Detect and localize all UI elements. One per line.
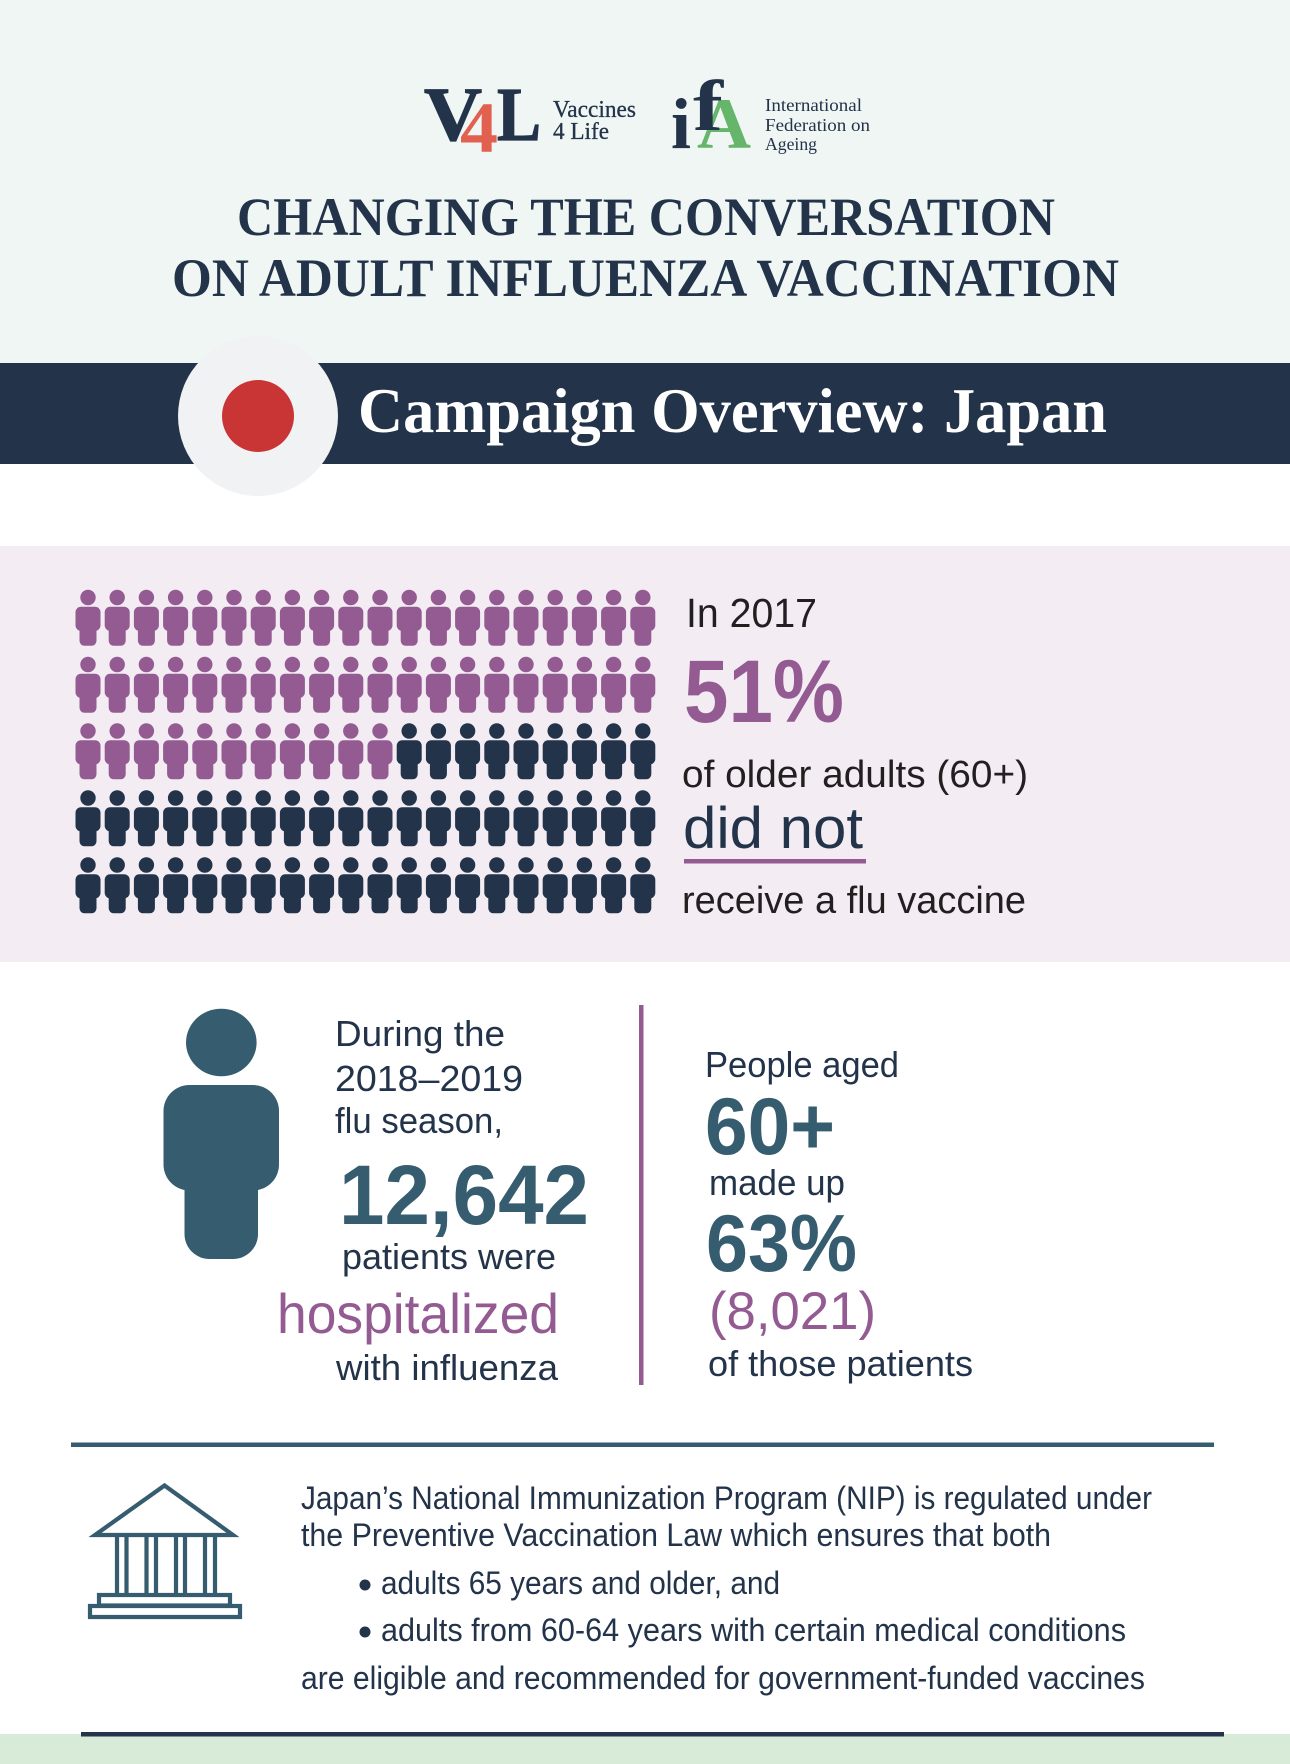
text block: 51% statistic: receive a flu vaccine	[682, 880, 1026, 922]
text block: people aged 60+: of those patients	[708, 1343, 973, 1384]
text block: people aged 60+	[705, 1044, 973, 1384]
logo: Vaccines 4 Life: V	[424, 73, 482, 157]
text block: national immunization program: Japan’s National Immunization Program (NIP) is regulated under	[301, 1480, 1152, 1516]
text block: people aged 60+: People aged	[705, 1044, 899, 1085]
title: ON ADULT INFLUENZA VACCINATION	[172, 248, 1119, 308]
text block: 51% statistic: did not	[683, 796, 863, 861]
title	[172, 187, 1119, 308]
icon: large person	[164, 1009, 279, 1259]
divider: vertical rule	[639, 1005, 644, 1385]
text block: 51% statistic: of older adults (60+)	[682, 754, 1028, 796]
logo: International Federation on Ageing: Federation on	[765, 115, 870, 135]
text block: national immunization program: the Preventive Vaccination Law which ensures that both	[301, 1517, 1051, 1553]
text block: 51% statistic: In 2017	[686, 590, 817, 636]
title: CHANGING THE CONVERSATION	[237, 187, 1055, 247]
logo: Vaccines 4 Life: 4 Life	[553, 119, 609, 145]
divider: horizontal rule	[71, 1442, 1214, 1447]
logo: International Federation on Ageing: A	[697, 84, 751, 164]
text block: people aged 60+: 60+	[705, 1082, 835, 1172]
text block: hospitalizations: patients were	[342, 1236, 556, 1277]
text block: national immunization program: adults 65 years and older, and	[381, 1565, 780, 1601]
text block: hospitalizations: flu season,	[335, 1100, 503, 1141]
text block: hospitalizations: 12,642	[339, 1148, 589, 1242]
text block: hospitalizations: During the	[335, 1013, 505, 1054]
text block: national immunization program: adults from 60-64 years with certain medical conditions	[381, 1612, 1126, 1648]
text block: hospitalizations	[277, 1013, 589, 1388]
logo: International Federation on Ageing: i	[671, 84, 691, 164]
text block: national immunization program	[301, 1480, 1152, 1696]
text block: people aged 60+: 63%	[706, 1199, 857, 1289]
logo: International Federation on Ageing	[671, 66, 870, 164]
text block: hospitalizations: with influenza	[335, 1347, 559, 1388]
text block: 51% statistic: 51%	[684, 641, 844, 741]
text block: hospitalizations: hospitalized	[277, 1282, 559, 1345]
logo: International Federation on Ageing: International	[765, 95, 862, 115]
header background	[0, 0, 1290, 363]
logo: Vaccines 4 Life: L	[497, 73, 541, 157]
banner heading: Campaign Overview: Japan	[358, 376, 1107, 446]
logo: International Federation on Ageing: f	[693, 66, 724, 146]
text block: people aged 60+: made up	[709, 1162, 845, 1203]
panel: 51% not vaccinated	[0, 546, 1290, 962]
text block: national immunization program: are eligible and recommended for government-funded vaccines	[301, 1660, 1145, 1696]
text block: 51% statistic	[682, 590, 1028, 922]
logo: International Federation on Ageing: Ageing	[765, 134, 817, 154]
logo: Vaccines 4 Life: Vaccines	[553, 97, 636, 123]
pictogram: 100 people, 51 purple	[76, 590, 655, 913]
footer band	[0, 1732, 1290, 1764]
icon: government building	[90, 1486, 240, 1617]
text block: hospitalizations: 2018–2019	[335, 1058, 523, 1099]
text block: people aged 60+: (8,021)	[709, 1282, 876, 1341]
logo: Vaccines 4 Life	[424, 73, 636, 168]
banner: campaign overview	[0, 336, 1290, 496]
logo: Vaccines 4 Life: 4	[460, 88, 498, 168]
icon: Japan flag	[178, 336, 338, 496]
